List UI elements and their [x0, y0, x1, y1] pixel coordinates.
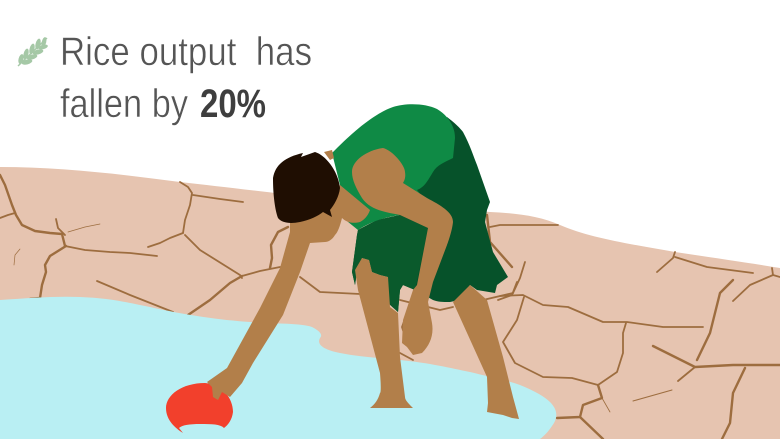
water pool: [0, 297, 556, 439]
headline text: [60, 30, 312, 126]
near arm and hand: [352, 148, 453, 355]
back hand sliver: [324, 150, 334, 160]
woman figure: [207, 104, 519, 419]
red bowl: [166, 383, 233, 433]
headline text: Rice output has: [60, 30, 312, 74]
icon: wheat sprig: [17, 37, 48, 66]
hair: [273, 152, 340, 223]
headline text: 20%: [200, 82, 266, 126]
neck, face and reaching arm: [207, 185, 370, 400]
shirt, light green: [332, 104, 455, 230]
skirt front panel: [352, 215, 428, 312]
far leg: [453, 285, 519, 419]
near leg: [355, 258, 413, 408]
headline text: fallen by: [60, 82, 188, 126]
back and skirt, dark green: [352, 117, 508, 312]
cracked dry ground: [0, 167, 780, 439]
